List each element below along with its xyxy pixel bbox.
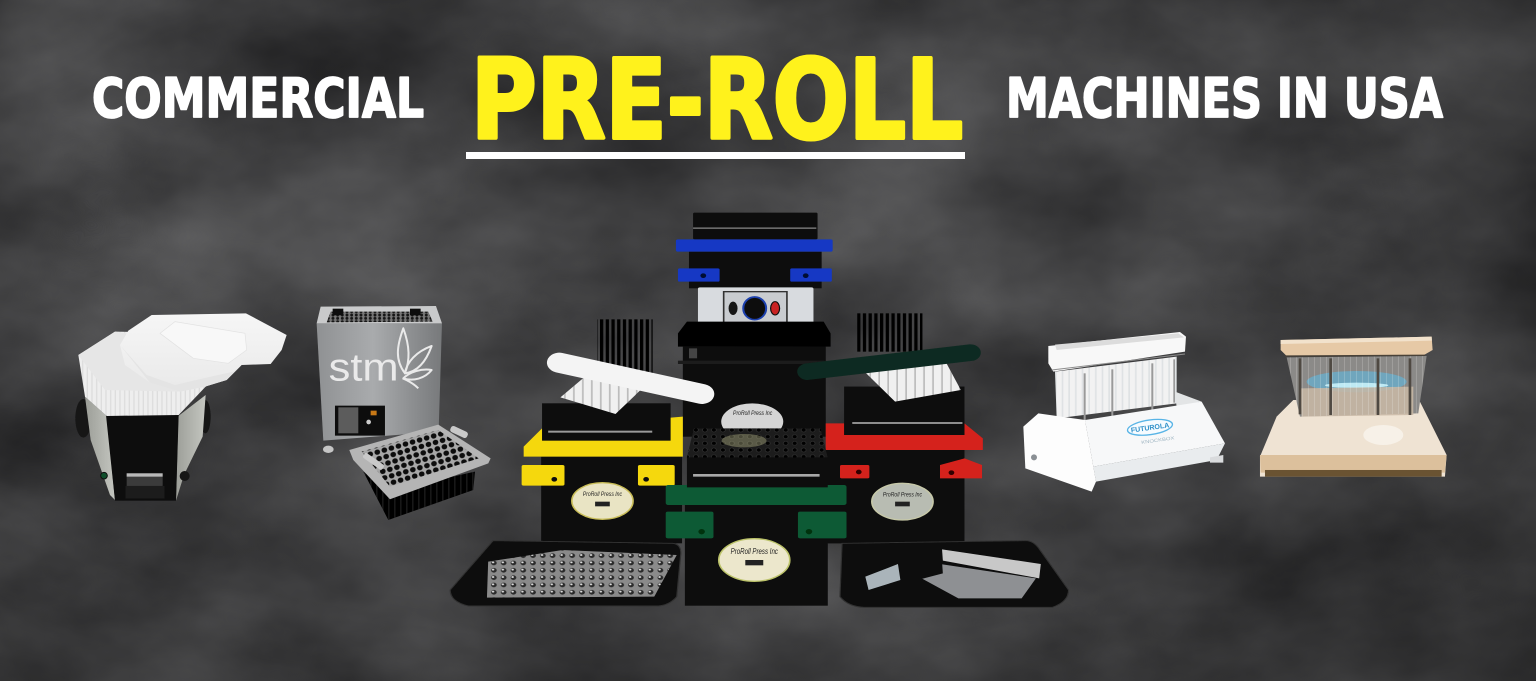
tube section	[1287, 356, 1427, 417]
white base	[1023, 402, 1225, 492]
stm logo: stm	[329, 346, 399, 390]
yellow press label	[572, 483, 633, 519]
top cap	[1281, 337, 1433, 356]
tube comb	[363, 472, 475, 520]
center press label	[721, 403, 783, 440]
green press label	[719, 539, 790, 581]
side handles	[75, 399, 211, 438]
title underline	[466, 152, 965, 159]
product: hexagonal cone filling machine	[75, 313, 287, 501]
title word: pre-roll: PRE-ROLL	[471, 36, 963, 164]
futurola logo: KNOCKBOX	[1141, 435, 1176, 445]
control panel	[335, 406, 385, 436]
red press label: ProRoll Press Inc	[883, 490, 922, 498]
frosted hex tube tray	[78, 332, 206, 416]
machine body	[85, 395, 206, 501]
tan base	[1260, 398, 1447, 477]
dark pre-rolls and roller	[807, 353, 971, 402]
foot	[323, 446, 334, 453]
top cap	[1048, 332, 1186, 372]
tube combs behind the rollers	[597, 319, 653, 373]
red press	[826, 387, 983, 543]
center press: blue	[676, 213, 833, 437]
white pre-rolls and roller	[559, 363, 702, 414]
futurola logo: FUTUROLA	[1131, 422, 1170, 435]
product: tan acrylic machine	[1260, 337, 1447, 477]
title word: commercial: COMMERCIAL	[92, 67, 424, 130]
right tray with roller and scraper	[840, 541, 1069, 607]
product: pre-roll press set	[450, 213, 1069, 607]
green press	[666, 428, 847, 606]
clear tube section	[1055, 357, 1202, 423]
hex lid	[120, 313, 287, 392]
center press label: ProRoll Press Inc	[733, 409, 772, 417]
product: futurola machine	[1023, 332, 1225, 492]
yellow press	[522, 403, 683, 543]
silver tray	[349, 425, 491, 499]
stm logo	[329, 328, 432, 390]
futurola logo	[1127, 417, 1176, 447]
left tray with metal plate	[450, 541, 681, 606]
green press label: ProRoll Press Inc	[731, 547, 778, 556]
yellow press label: ProRoll Press Inc	[583, 490, 622, 498]
title	[92, 36, 1443, 164]
steel box	[317, 306, 442, 441]
product: stm steel machine	[317, 306, 491, 520]
red press label	[872, 483, 933, 520]
